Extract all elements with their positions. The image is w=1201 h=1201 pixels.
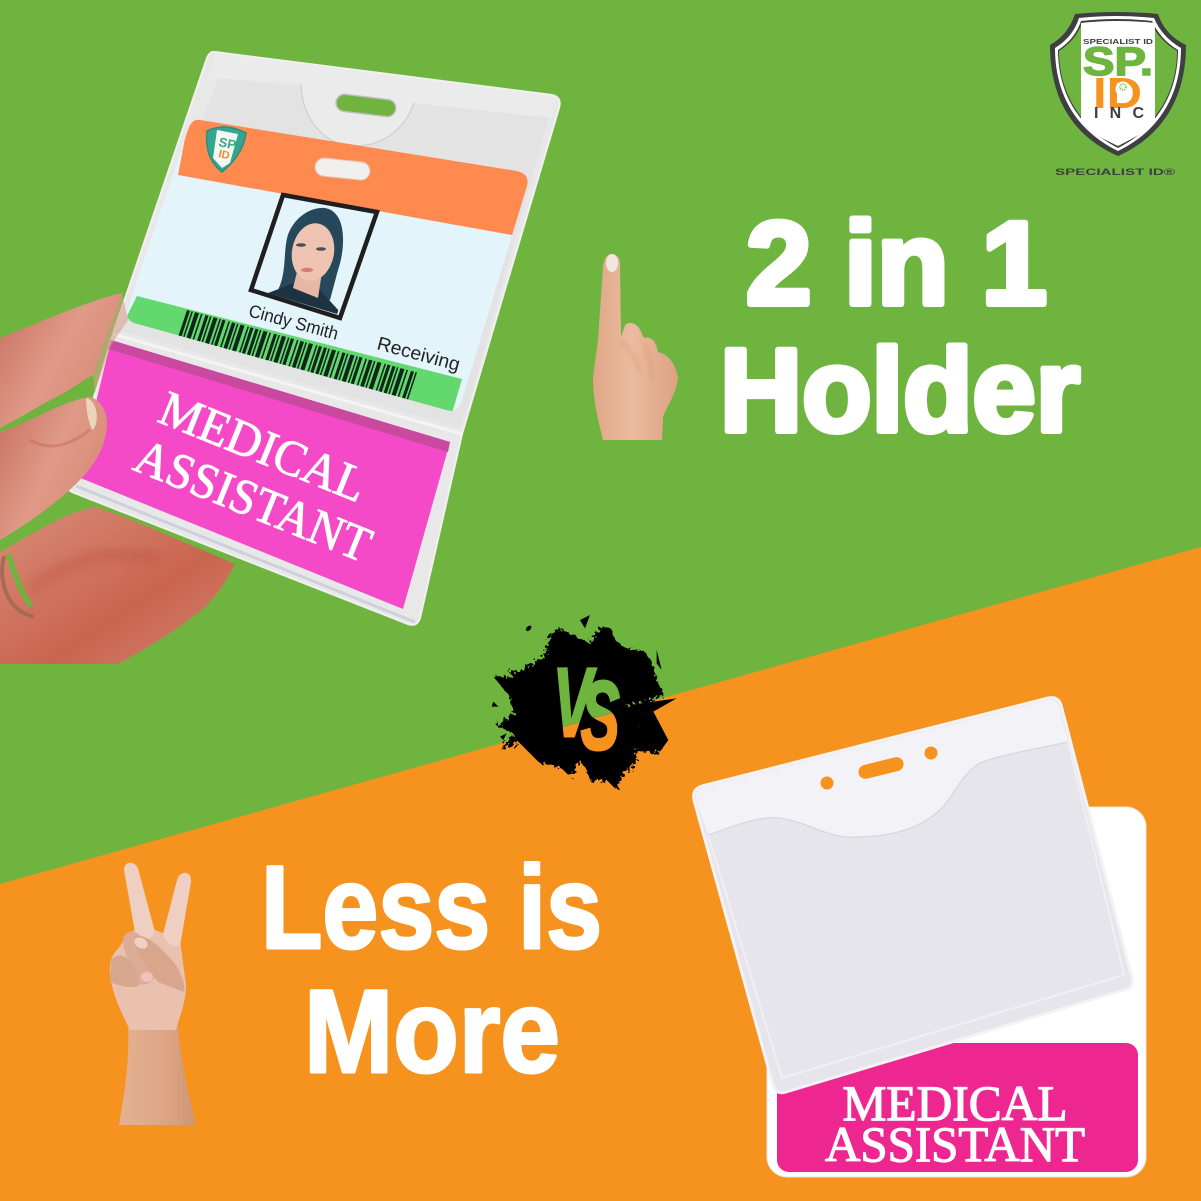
finger: lower hand	[0, 507, 235, 664]
product photo: two-in-one badge holder in hand	[68, 52, 560, 625]
knuckle shadows	[621, 340, 652, 380]
headline: 2 in 1 Holder	[720, 198, 1080, 457]
left punch hole	[818, 774, 836, 792]
ring	[2, 556, 34, 617]
headline line 1: Less is	[261, 842, 602, 974]
hair	[278, 208, 343, 300]
center slot	[855, 753, 907, 783]
mini shield logo on card	[207, 127, 246, 172]
logo top text: SPECIALIST ID	[1083, 39, 1153, 46]
finger seen through vinyl	[93, 293, 128, 393]
name text: Cindy Smith	[247, 301, 341, 344]
shield inner dark	[1058, 19, 1178, 148]
pink badge buddy	[78, 340, 450, 609]
headline line 2: Holder	[720, 325, 1080, 457]
pink badge fold shadow	[108, 340, 450, 452]
neck	[293, 272, 322, 298]
mini shield logo on card: SP	[217, 134, 238, 153]
ID card	[127, 120, 528, 411]
shield interior green	[1059, 21, 1177, 146]
clear vinyl holder	[694, 698, 1132, 1093]
palm	[110, 929, 186, 1030]
gap between fingers	[8, 554, 31, 606]
hand holding the badge	[0, 293, 235, 664]
white badge card	[767, 807, 1146, 1177]
finger: thumb	[0, 397, 107, 540]
finger: upper	[0, 293, 122, 428]
flap with slot	[208, 54, 556, 146]
headline line 1: 2 in 1	[746, 198, 1047, 330]
eyes	[296, 243, 306, 247]
pink band text 2: ASSISTANT	[825, 1116, 1085, 1172]
thumb	[134, 936, 184, 992]
logo head icon	[1116, 82, 1130, 101]
shield white band	[1055, 16, 1181, 151]
holder lower edge shine	[76, 486, 415, 622]
icon: two fingers peace sign	[110, 863, 196, 1125]
pink band	[777, 1043, 1138, 1172]
shoulders	[268, 284, 338, 314]
card slot	[314, 157, 371, 181]
orange card band	[178, 112, 540, 235]
crease between pockets	[113, 334, 462, 434]
fingertip on thumb	[141, 972, 153, 982]
right punch hole	[922, 744, 940, 762]
thumb crease	[30, 430, 90, 446]
logo wordmark: SPECIALIST ID®	[1055, 167, 1175, 178]
holder body	[68, 52, 560, 625]
logo INC: INC	[1094, 105, 1144, 122]
lips	[301, 268, 313, 272]
holder top flap	[696, 700, 1068, 837]
badge text line 2: ASSISTANT	[127, 427, 380, 573]
index finger	[124, 863, 155, 940]
thumbnail	[86, 398, 97, 430]
slot	[335, 93, 397, 118]
fingernail	[606, 254, 618, 272]
pink band text 1: MEDICAL	[842, 1075, 1068, 1131]
VS splatter badge	[492, 615, 677, 790]
ID photo	[251, 195, 377, 322]
department text: Receiving	[375, 334, 462, 376]
holder upper tint	[118, 78, 550, 428]
forearm	[119, 1025, 196, 1125]
logo ID: ID	[1093, 69, 1142, 118]
face	[292, 223, 334, 280]
logo: Specialist ID shield	[1050, 12, 1186, 178]
logo white column	[1081, 21, 1155, 146]
logo SP: SP.	[1083, 40, 1153, 84]
background: orange diagonal panel	[0, 547, 1201, 1201]
middle finger	[163, 873, 191, 946]
icon: pointing one finger	[593, 254, 678, 440]
shield outer	[1050, 12, 1186, 156]
VS text, orange below the diagonal: VS	[553, 649, 620, 770]
badge text line 1: MEDICAL	[152, 379, 375, 513]
green card band	[120, 296, 462, 420]
barcode	[182, 324, 412, 387]
ink splatter	[492, 615, 677, 790]
VS text, green above the diagonal: VS	[553, 649, 620, 770]
holder inner edges	[708, 742, 1124, 1078]
folded fingers	[123, 932, 158, 984]
headline line 2: More	[304, 966, 560, 1098]
headline: Less is More	[261, 842, 602, 1098]
product: white badge with pink band and clear holder	[694, 698, 1146, 1177]
mini shield logo on card: ID	[217, 148, 231, 162]
